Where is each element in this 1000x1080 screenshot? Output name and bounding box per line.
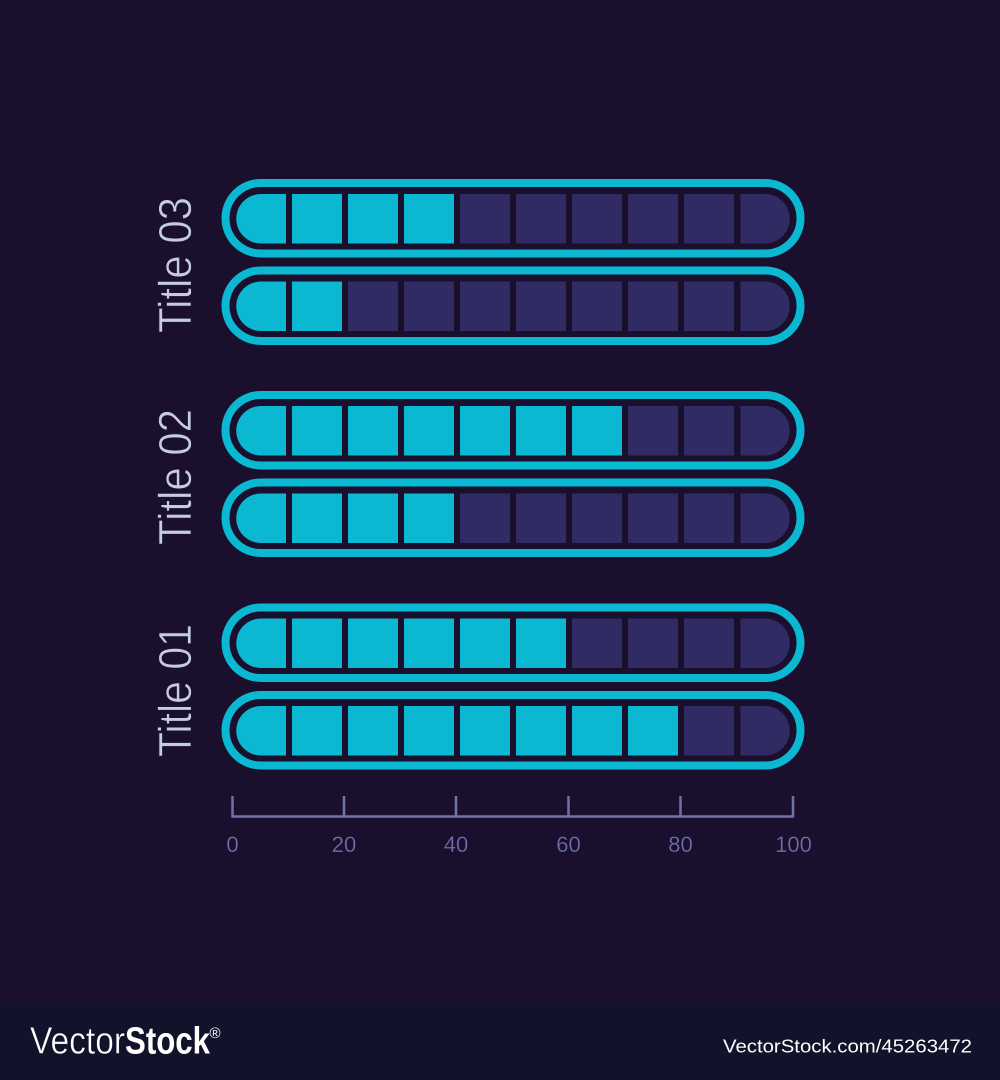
bar: Title 03 lower, 20 percent xyxy=(226,270,800,341)
group: Title 02 xyxy=(149,395,800,553)
footer: watermark band xyxy=(0,1001,1000,1080)
axis: scale 0 to 100: 60 xyxy=(556,832,581,857)
label: Title 01: Title 01 xyxy=(149,624,201,757)
axis: scale 0 to 100: 0 xyxy=(226,832,239,857)
label: Title 03: Title 03 xyxy=(149,197,201,333)
label: Title 02: Title 02 xyxy=(149,409,201,545)
bar: Title 03 upper, 40 percent xyxy=(226,183,800,254)
logo: VectorStock xyxy=(30,1020,211,1062)
axis: scale 0 to 100 xyxy=(226,796,812,857)
bar: Title 02 upper, 70 percent xyxy=(226,395,800,466)
bar: Title 01 upper, 60 percent xyxy=(226,608,800,678)
logo: VectorStock: Vector xyxy=(30,1020,125,1062)
axis: scale 0 to 100: 40 xyxy=(444,832,468,857)
group: Title 03 xyxy=(149,183,800,341)
axis: scale 0 to 100: 80 xyxy=(668,832,693,857)
logo: registered mark: ® xyxy=(210,1025,221,1042)
bar: Title 02 lower, 40 percent xyxy=(226,482,800,553)
group: Title 01 xyxy=(149,608,800,766)
logo: VectorStock: Stock xyxy=(125,1020,211,1062)
axis: scale 0 to 100: 20 xyxy=(332,832,356,857)
axis: scale 0 to 100: 100 xyxy=(775,832,812,857)
footer: image id: VectorStock.com/45263472 xyxy=(723,1036,972,1056)
bar: Title 01 lower, 80 percent xyxy=(226,695,800,766)
